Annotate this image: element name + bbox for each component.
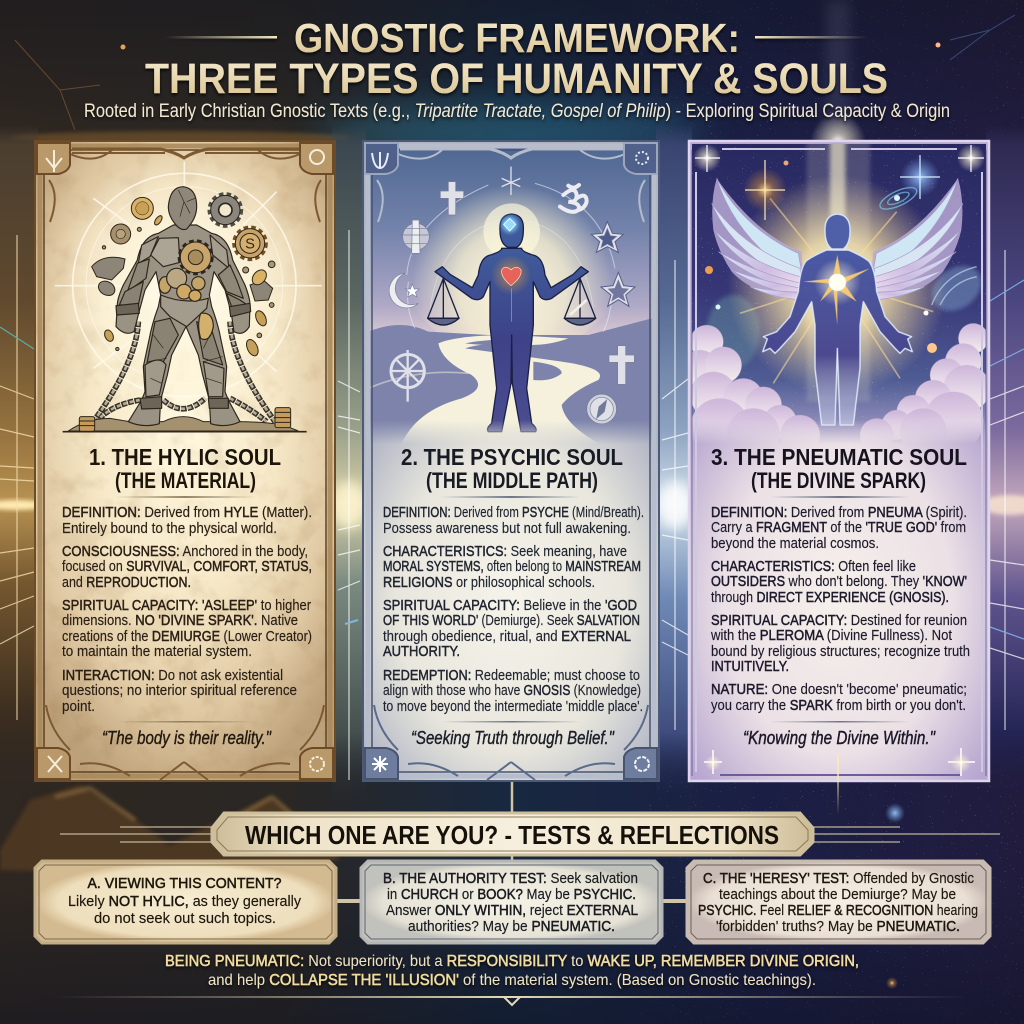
text: hylic spiritual capacity: creations of the DEMIURGE (Lower Creator) (62, 628, 312, 645)
title (84, 15, 950, 122)
illustration: stone figure in chains (51, 152, 322, 432)
text: pneumatic characteristics: OUTSIDERS who don't belong. They 'KNOW' (711, 573, 967, 590)
icon: clouds (682, 323, 990, 462)
text: psychic characteristics (383, 543, 641, 591)
orbit arcs (407, 183, 615, 332)
text: psychic characteristics: RELIGIONS or philosophical schools. (383, 574, 595, 591)
text: psychic spiritual capacity: OF THIS WORLD' (Demiurge). Seek SALVATION (383, 612, 640, 629)
closing statement: being pneumatic: BEING PNEUMATIC: Not superiority, but a RESPONSIBILITY to WAKE UP, REMEMBER DIVINE ORIGIN, (165, 953, 859, 970)
heading: hylic soul (89, 444, 281, 493)
icon: religious symbols (389, 167, 635, 424)
text: hylic interaction: INTERACTION: Do not ask existential (62, 667, 283, 684)
text: pneumatic spiritual capacity: bound by religious structures; recognize truth (711, 643, 970, 660)
box: test B: in CHURCH or BOOK? May be PSYCHIC. (387, 887, 636, 903)
text: hylic consciousness: CONSCIOUSNESS: Anchored in the body, (62, 543, 308, 560)
box: test A: do not seek out such topics. (94, 911, 276, 927)
text: pneumatic nature: you carry the SPARK from birth or you don't. (711, 697, 966, 714)
box: test C: C. THE 'HERESY' TEST: Offended by Gnostic (703, 871, 974, 887)
closing statement: being pneumatic (165, 953, 859, 989)
heading: hylic soul: 1. THE HYLIC SOUL (89, 444, 281, 470)
text: hylic spiritual capacity: SPIRITUAL CAPACITY: 'ASLEEP' to higher (62, 597, 311, 614)
icon: galaxies (877, 183, 977, 305)
box: test C: 'forbidden' truths? May be PNEUMATIC. (716, 919, 960, 935)
text: pneumatic characteristics (711, 558, 967, 606)
text: pneumatic spiritual capacity (710, 612, 970, 675)
text: hylic consciousness: focused on SURVIVAL, COMFORT, STATUS, (62, 558, 312, 575)
text: psychic redemption: to move beyond the intermediate 'middle place'. (383, 698, 643, 715)
heading: pneumatic soul (711, 444, 967, 493)
illustration: figure with scales and religious symbols (370, 148, 652, 442)
text: hylic spiritual capacity: to maintain the material system. (62, 643, 252, 660)
text: pneumatic spiritual capacity: INTUITIVELY. (711, 658, 789, 675)
box: test C: PSYCHIC. Feel RELIEF & RECOGNITION hearing (698, 903, 978, 919)
figure body (763, 214, 912, 425)
text: psychic spiritual capacity: through obedience, ritual, and EXTERNAL (383, 628, 631, 645)
icon: om symbol (560, 185, 587, 212)
box: test A: Likely NOT HYLIC, as they generally (68, 894, 302, 910)
quote: psychic: “Seeking Truth through Belief." (411, 728, 615, 748)
closing statement: being pneumatic: and help COLLAPSE THE 'ILLUSION' of the material system. (Based on Gnostic teachings). (208, 972, 816, 989)
heading: psychic soul: 2. THE PSYCHIC SOUL (401, 444, 623, 470)
box: test C (687, 861, 990, 943)
quote: hylic: “The body is their reality." (102, 728, 272, 748)
text: psychic redemption: REDEMPTION: Redeemable; must choose to (383, 667, 640, 684)
frame: pneumatic border (689, 141, 989, 815)
title line 1: GNOSTIC FRAMEWORK: (294, 15, 740, 61)
illustration: winged luminous figure in cosmos (692, 144, 986, 441)
icon: balance scales (428, 278, 596, 325)
frame: hylic ornate border (35, 141, 335, 781)
panel: psychic soul (362, 140, 660, 782)
icon: rocky ground (63, 408, 307, 432)
box: test B (361, 861, 662, 943)
text: psychic spiritual capacity (383, 597, 640, 660)
box: test B: authorities? May be PNEUMATIC. (408, 919, 615, 935)
frame: psychic border (363, 141, 659, 781)
title ornament right (755, 36, 868, 38)
icon: wings (712, 178, 963, 300)
heading: pneumatic soul: (THE DIVINE SPARK) (751, 468, 926, 493)
heading: hylic soul: (THE MATERIAL) (115, 468, 256, 493)
box: test A (35, 861, 336, 943)
icon: central star (816, 260, 860, 304)
banner: which one are you: WHICH ONE ARE YOU? - TESTS & REFLECTIONS (245, 820, 779, 850)
heading: psychic soul: (THE MIDDLE PATH) (426, 468, 598, 493)
icon: heart (502, 267, 521, 286)
quote: pneumatic: “Knowing the Divine Within." (743, 728, 936, 748)
text: pneumatic characteristics: CHARACTERISTICS: Often feel like (711, 558, 916, 575)
text: psychic definition: DEFINITION: Derived from PSYCHE (Mind/Breath). (383, 504, 644, 521)
text: hylic definition: DEFINITION: Derived from HYLE (Matter). (62, 504, 312, 521)
text: hylic definition: Entirely bound to the physical world. (62, 520, 277, 537)
box: test C: teachings about the Demiurge? May be (719, 887, 956, 903)
icon: gears and coins (92, 195, 275, 358)
text: hylic interaction (62, 667, 297, 715)
subtitle: Rooted in Early Christian Gnostic Texts (e.g., Tripartite Tractate, Gospel of Philip) - Exploring Spiritual Capacity & Origin (84, 101, 950, 122)
title line 2: THREE TYPES OF HUMANITY & SOULS (145, 55, 888, 103)
text: hylic consciousness (62, 543, 312, 591)
text: pneumatic nature (711, 681, 967, 714)
text: pneumatic characteristics: through DIRECT EXPERIENCE (GNOSIS). (711, 589, 949, 606)
figure body (428, 214, 596, 432)
text: pneumatic definition: beyond the material cosmos. (711, 535, 879, 552)
text: psychic definition: Possess awareness but not full awakening. (383, 520, 631, 537)
title ornament left (165, 36, 277, 38)
heading: pneumatic soul: 3. THE PNEUMATIC SOUL (711, 444, 967, 470)
text: hylic definition (62, 504, 312, 537)
box: test A: A. VIEWING THIS CONTENT? (88, 876, 282, 892)
box: test B: Answer ONLY WITHIN, reject EXTERNAL (386, 903, 638, 919)
text: hylic interaction: questions; no interior spiritual reference (62, 682, 297, 699)
banner: which one are you (212, 813, 813, 855)
text: psychic spiritual capacity: AUTHORITY. (383, 643, 460, 660)
panel: pneumatic soul (682, 135, 990, 815)
text: hylic spiritual capacity: dimensions. NO 'DIVINE SPARK'. Native (62, 612, 298, 629)
text: psychic redemption (383, 667, 643, 715)
text: psychic spiritual capacity: SPIRITUAL CAPACITY: Believe in the 'GOD (383, 597, 637, 614)
text: pneumatic definition: DEFINITION: Derived from PNEUMA (Spirit). (711, 504, 967, 521)
box: test B: B. THE AUTHORITY TEST: Seek salvation (383, 871, 638, 887)
text: hylic consciousness: and REPRODUCTION. (62, 574, 191, 591)
text: pneumatic nature: NATURE: One doesn't 'become' pneumatic; (711, 681, 967, 698)
background: light strips beside cards (0, 125, 1024, 800)
text: pneumatic definition: Carry a FRAGMENT of the 'TRUE GOD' from (711, 519, 966, 536)
icon: sparkle stars (693, 144, 985, 353)
text: pneumatic definition (711, 504, 967, 552)
icon: chains (93, 322, 275, 422)
panel: hylic soul (34, 140, 336, 782)
text: psychic characteristics: MORAL SYSTEMS, often belong to MAINSTREAM (383, 558, 641, 575)
text: pneumatic spiritual capacity: with the PLEROMA (Divine Fullness). Not (710, 627, 953, 644)
heading: psychic soul (401, 444, 623, 493)
text: hylic spiritual capacity (62, 597, 312, 660)
text: hylic interaction: point. (62, 698, 95, 715)
bottom divider with chevron (50, 996, 970, 1005)
coin symbol S: S (245, 236, 255, 252)
stone body (116, 187, 251, 426)
connector lines (60, 782, 1000, 901)
text: psychic definition (383, 504, 644, 537)
text: psychic characteristics: CHARACTERISTICS: Seek meaning, have (383, 543, 627, 560)
text: pneumatic spiritual capacity: SPIRITUAL CAPACITY: Destined for reunion (711, 612, 967, 629)
text: psychic redemption: align with those who have GNOSIS (Knowledge) (383, 682, 641, 699)
